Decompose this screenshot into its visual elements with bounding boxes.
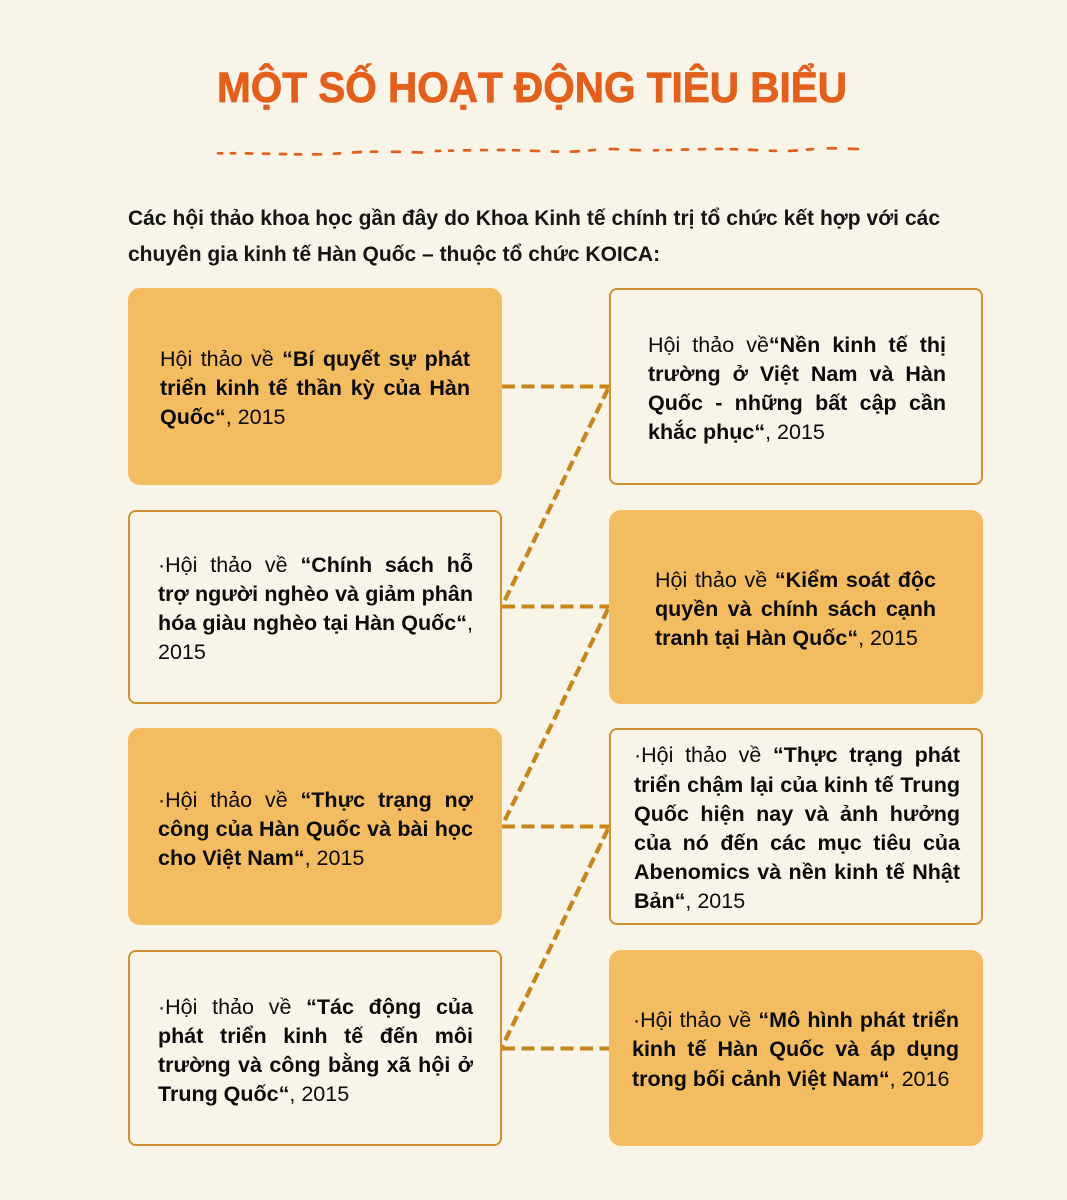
panel: Thực trạng phát triển chậm: ·Hội thảo về “Thực trạng phát	[634, 743, 960, 767]
panel: Bí quyết: Hội thảo về “Bí quyết sự phát	[160, 347, 470, 371]
panel: Thực trạng phát triển chậm: Bản“, 2015	[634, 889, 745, 913]
panel: Chính sách hỗ trợ: ·Hội thảo về “Chính sách hỗ	[158, 553, 473, 577]
panel: Thực trạng phát triển chậm: triển chậm lại của kinh tế Trung	[634, 773, 960, 797]
panel: Mô hình phát triển: ·Hội thảo về “Mô hình phát triển	[633, 1008, 959, 1032]
panel: Thực trạng phát triển chậm: của nó đến các mục tiêu của	[634, 831, 960, 855]
intro text	[128, 207, 940, 266]
panel: Nền kinh tế thị trường: Hội thảo về“Nền kinh tế thị	[648, 333, 946, 357]
panel: Tác động phát triển	[128, 950, 502, 1146]
panel: Bí quyết: triển kinh tế thần kỳ của Hàn	[160, 376, 470, 400]
panel: Tác động phát triển: Trung Quốc“, 2015	[158, 1082, 349, 1106]
panel: Bí quyết: Quốc“, 2015	[160, 405, 285, 429]
panel: Bí quyết	[128, 288, 502, 485]
intro text: Các hội thảo khoa học gần đây do Khoa Kinh tế chính trị tổ chức kết hợp với các	[128, 207, 940, 230]
panel: Thực trạng phát triển chậm	[609, 728, 983, 925]
panel: Nền kinh tế thị trường: Quốc - những bất cập cần	[648, 391, 946, 415]
panel: Kiểm soát độc quyền: Hội thảo về “Kiểm soát độc	[655, 568, 936, 592]
panel: Mô hình phát triển: kinh tế Hàn Quốc và áp dụng	[632, 1037, 959, 1061]
panel: Chính sách hỗ trợ	[128, 510, 502, 704]
title underline	[216, 147, 860, 156]
panel: Thực trạng nợ công: ·Hội thảo về “Thực trạng nợ	[158, 788, 473, 812]
panel: Chính sách hỗ trợ: hóa giàu nghèo tại Hàn Quốc“,	[158, 611, 473, 635]
panel: Nền kinh tế thị trường: trường ở Việt Nam và Hàn	[648, 362, 946, 386]
panel: Tác động phát triển: phát triển kinh tế đến môi	[158, 1024, 473, 1048]
panel: Nền kinh tế thị trường	[609, 288, 983, 485]
panel: Kiểm soát độc quyền: tranh tại Hàn Quốc“, 2015	[655, 626, 918, 650]
panel: Chính sách hỗ trợ: trợ người nghèo và giảm phân	[158, 582, 473, 606]
panel: Thực trạng nợ công: công của Hàn Quốc và bài học	[158, 817, 473, 841]
panel: Tác động phát triển: ·Hội thảo về “Tác động của	[158, 994, 473, 1018]
panel: Mô hình phát triển: trong bối cảnh Việt Nam“, 2016	[632, 1067, 949, 1091]
panel: Mô hình phát triển	[609, 950, 983, 1146]
panel: Kiểm soát độc quyền	[609, 510, 983, 704]
intro text: chuyên gia kinh tế Hàn Quốc – thuộc tổ chức KOICA:	[128, 243, 660, 266]
panel: Thực trạng nợ công: cho Việt Nam“, 2015	[158, 846, 364, 870]
panel: Thực trạng phát triển chậm: Abenomics và nền kinh tế Nhật	[634, 860, 960, 884]
panel: Nền kinh tế thị trường: khắc phục“, 2015	[648, 420, 825, 444]
panel: Thực trạng nợ công	[128, 728, 502, 925]
panel: Chính sách hỗ trợ: 2015	[158, 640, 206, 664]
panel: Tác động phát triển: trường và công bằng xã hội ở	[158, 1052, 473, 1076]
title: MỘT SỐ HOẠT ĐỘNG TIÊU BIỂU	[217, 63, 847, 112]
panel: Kiểm soát độc quyền: quyền và chính sách cạnh	[655, 597, 936, 621]
panel: Thực trạng phát triển chậm: Quốc hiện nay và ảnh hưởng	[634, 802, 960, 826]
